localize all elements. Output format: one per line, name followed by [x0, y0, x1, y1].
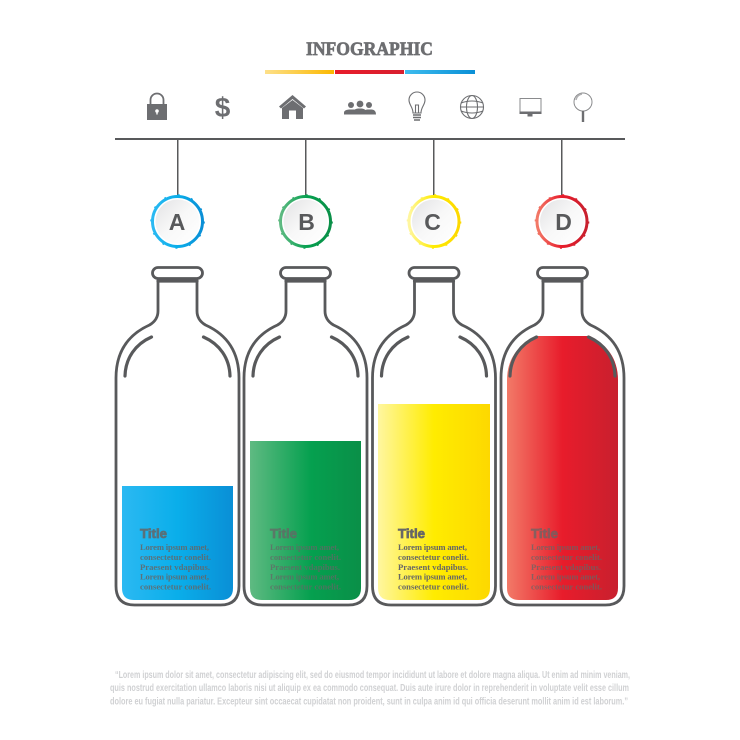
- badge C: [408, 196, 460, 247]
- label C: Praesent vdapibus.: [398, 562, 468, 572]
- badge C: C: [424, 209, 441, 235]
- icon: padlock: [147, 94, 167, 120]
- label C: Title: [398, 526, 425, 541]
- label A: Lorem ipsum amet,: [140, 542, 209, 552]
- label D: Praesent vdapibus.: [531, 562, 601, 572]
- label B: consectetur conelit.: [270, 582, 341, 592]
- label C: consectetur conelit.: [398, 582, 469, 592]
- bottle C: yellow: [372, 268, 496, 605]
- title: INFOGRAPHIC: [306, 39, 433, 60]
- bottle D: red: [501, 268, 624, 605]
- badge A: [152, 196, 203, 247]
- label C: Lorem ipsum amet,: [398, 572, 467, 582]
- bottle A: blue: [116, 268, 239, 605]
- label A: Praesent vdapibus.: [140, 562, 210, 572]
- label B: Praesent vdapibus.: [270, 562, 340, 572]
- outline D: [501, 268, 624, 605]
- label D: Title: [531, 526, 558, 541]
- label C: consectetur conelit.: [398, 552, 469, 562]
- icon: people: [344, 101, 376, 114]
- badge A: A: [169, 209, 185, 235]
- label A: consectetur conelit.: [140, 582, 211, 592]
- badge D: [536, 196, 588, 247]
- label D: consectetur conelit.: [531, 552, 602, 562]
- label D: consectetur conelit.: [531, 582, 602, 592]
- label D: Lorem ipsum amet,: [531, 572, 600, 582]
- connector stems: [177, 139, 562, 195]
- title colour bar: [265, 70, 475, 74]
- icon: monitor: [520, 98, 542, 116]
- liquid D: [507, 336, 618, 600]
- label A: consectetur conelit.: [140, 552, 211, 562]
- label B: [270, 526, 341, 592]
- liquid A: [122, 486, 233, 600]
- icon: globe: [460, 96, 484, 118]
- label D: Lorem ipsum amet,: [531, 542, 600, 552]
- liquid C: [378, 404, 490, 600]
- label C: Lorem ipsum amet,: [398, 542, 467, 552]
- label B: Lorem ipsum amet,: [270, 572, 339, 582]
- badge B: B: [298, 209, 315, 235]
- label A: [140, 526, 211, 592]
- bottle B: green: [244, 268, 367, 605]
- label B: consectetur conelit.: [270, 552, 341, 562]
- icon: house: [279, 95, 306, 119]
- label D: [531, 526, 602, 592]
- badge B: [280, 196, 331, 247]
- icon: dollar sign: $: [215, 92, 231, 123]
- label A: Lorem ipsum amet,: [140, 572, 209, 582]
- outline B: [244, 268, 367, 605]
- liquid B: [250, 441, 361, 600]
- icon: light bulb: [409, 92, 425, 120]
- label C: [398, 526, 469, 592]
- footer quote: [110, 669, 630, 708]
- horizontal connector line: [115, 138, 625, 140]
- outline A: [116, 268, 239, 605]
- label B: Title: [270, 526, 297, 541]
- label B: Lorem ipsum amet,: [270, 542, 339, 552]
- icon: magnifying glass: [574, 93, 592, 122]
- label A: Title: [140, 526, 167, 541]
- badge D: D: [555, 209, 572, 235]
- outline C: [372, 268, 496, 605]
